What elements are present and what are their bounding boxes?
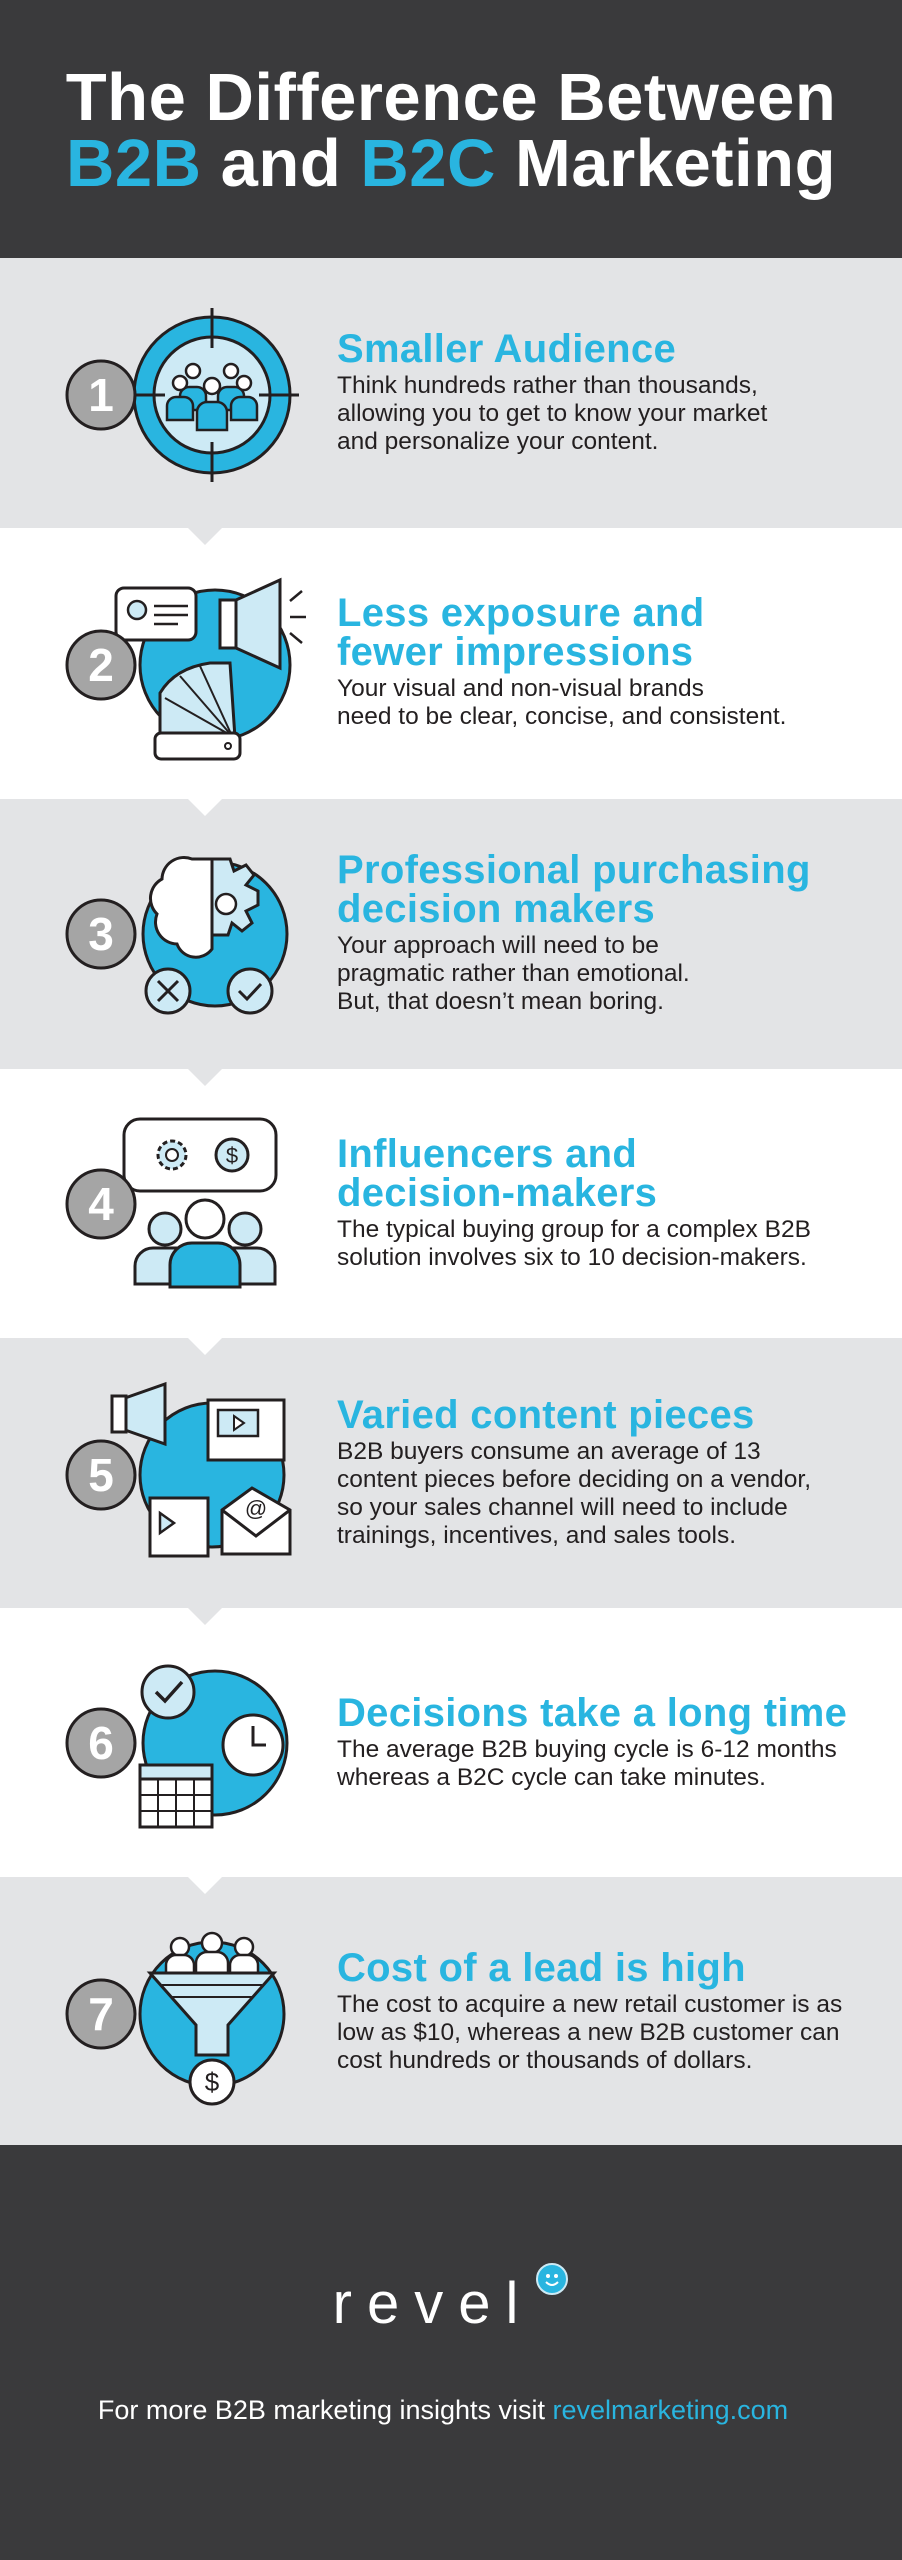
logo: revel: revel	[333, 2271, 533, 2336]
panel: 7 cost of lead	[0, 1877, 902, 2145]
panel: 6 decisions take long	[0, 1608, 902, 1877]
icon: group with speech bubble	[66, 1118, 278, 1288]
text: cost of lead: Cost of a lead is high	[337, 1946, 746, 1990]
text: decisions take long	[337, 1690, 847, 1790]
header	[0, 0, 902, 258]
panel: 1 smaller audience	[0, 258, 902, 528]
icon: check, clock, calendar: 6	[88, 1717, 114, 1769]
icon: group with speech bubble: $	[226, 1143, 238, 1168]
text: smaller audience: allowing you to get to know your market	[337, 400, 767, 426]
text: influencers: decision-makers	[337, 1171, 657, 1215]
text: influencers	[337, 1132, 811, 1271]
title line 2: B2B and B2C Marketing	[66, 126, 836, 201]
text: influencers: solution involves six to 10 decision-makers.	[337, 1244, 807, 1271]
icon: brand card, megaphone and swatches: 2	[88, 639, 114, 691]
text: decisions take long: whereas a B2C cycle can take minutes.	[337, 1764, 766, 1790]
footer text: For more B2B marketing insights visit revelmarketing.com	[98, 2395, 788, 2425]
text: professional purchasing: pragmatic rather than emotional.	[337, 960, 690, 987]
text: less exposure	[337, 591, 786, 730]
text: cost of lead: The cost to acquire a new retail customer is as	[337, 1990, 842, 2018]
title line 1: The Difference Between	[66, 60, 836, 135]
text: professional purchasing: But, that doesn’t mean boring.	[337, 988, 664, 1015]
text: smaller audience: and personalize your content.	[337, 428, 658, 454]
icon: group with speech bubble: 4	[88, 1178, 114, 1230]
text: smaller audience: Smaller Audience	[337, 326, 676, 370]
panel: 4 influencers	[0, 1069, 902, 1338]
icon: megaphone, video and email	[66, 1382, 292, 1558]
panel: 5 varied content	[0, 1338, 902, 1608]
text: varied content: content pieces before deciding on a vendor,	[337, 1466, 811, 1492]
panel: 2 less exposure	[0, 528, 902, 799]
icon: megaphone, video and email: @	[245, 1496, 267, 1521]
icon: brain, gear, x and check	[66, 856, 288, 1014]
text: less exposure: Less exposure and	[337, 591, 704, 635]
text: varied content: so your sales channel will need to include	[337, 1494, 788, 1520]
text: professional purchasing: decision makers	[337, 887, 655, 931]
text: professional purchasing: Professional purchasing	[337, 848, 811, 892]
icon: funnel and dollar	[66, 1932, 286, 2106]
icon: brand card, megaphone and swatches	[66, 578, 306, 760]
text: varied content: trainings, incentives, and sales tools.	[337, 1522, 736, 1548]
text: cost of lead	[337, 1946, 842, 2074]
text: professional purchasing	[337, 848, 811, 1015]
text: decisions take long: Decisions take a long time	[337, 1690, 847, 1734]
text: influencers: Influencers and	[337, 1132, 637, 1176]
icon: brain, gear, x and check: 3	[88, 908, 114, 960]
icon: funnel and dollar: 7	[88, 1988, 114, 2040]
icon: check, clock, calendar	[66, 1664, 288, 1828]
text: varied content	[337, 1392, 811, 1548]
text: less exposure: Your visual and non-visual brands	[337, 675, 704, 702]
text: cost of lead: low as $10, whereas a new B2B customer can	[337, 2018, 840, 2046]
text: varied content: Varied content pieces	[337, 1392, 755, 1436]
footer	[0, 2145, 902, 2560]
text: varied content: B2B buyers consume an average of 13	[337, 1438, 761, 1464]
text: smaller audience	[337, 326, 768, 454]
text: influencers: The typical buying group for a complex B2B	[337, 1216, 811, 1243]
icon: target audience	[66, 308, 299, 482]
icon: megaphone, video and email: 5	[88, 1449, 114, 1501]
text: professional purchasing: Your approach will need to be	[337, 932, 659, 959]
text: less exposure: fewer impressions	[337, 630, 693, 674]
text: cost of lead: cost hundreds or thousands of dollars.	[337, 2046, 752, 2074]
text: smaller audience: Think hundreds rather than thousands,	[337, 372, 758, 398]
text: decisions take long: The average B2B buying cycle is 6-12 months	[337, 1736, 837, 1762]
text: less exposure: need to be clear, concise, and consistent.	[337, 703, 786, 730]
panel: 3 professional purchasing	[0, 799, 902, 1069]
icon: funnel and dollar: $	[205, 2067, 220, 2097]
icon: target audience: 1	[88, 369, 114, 421]
